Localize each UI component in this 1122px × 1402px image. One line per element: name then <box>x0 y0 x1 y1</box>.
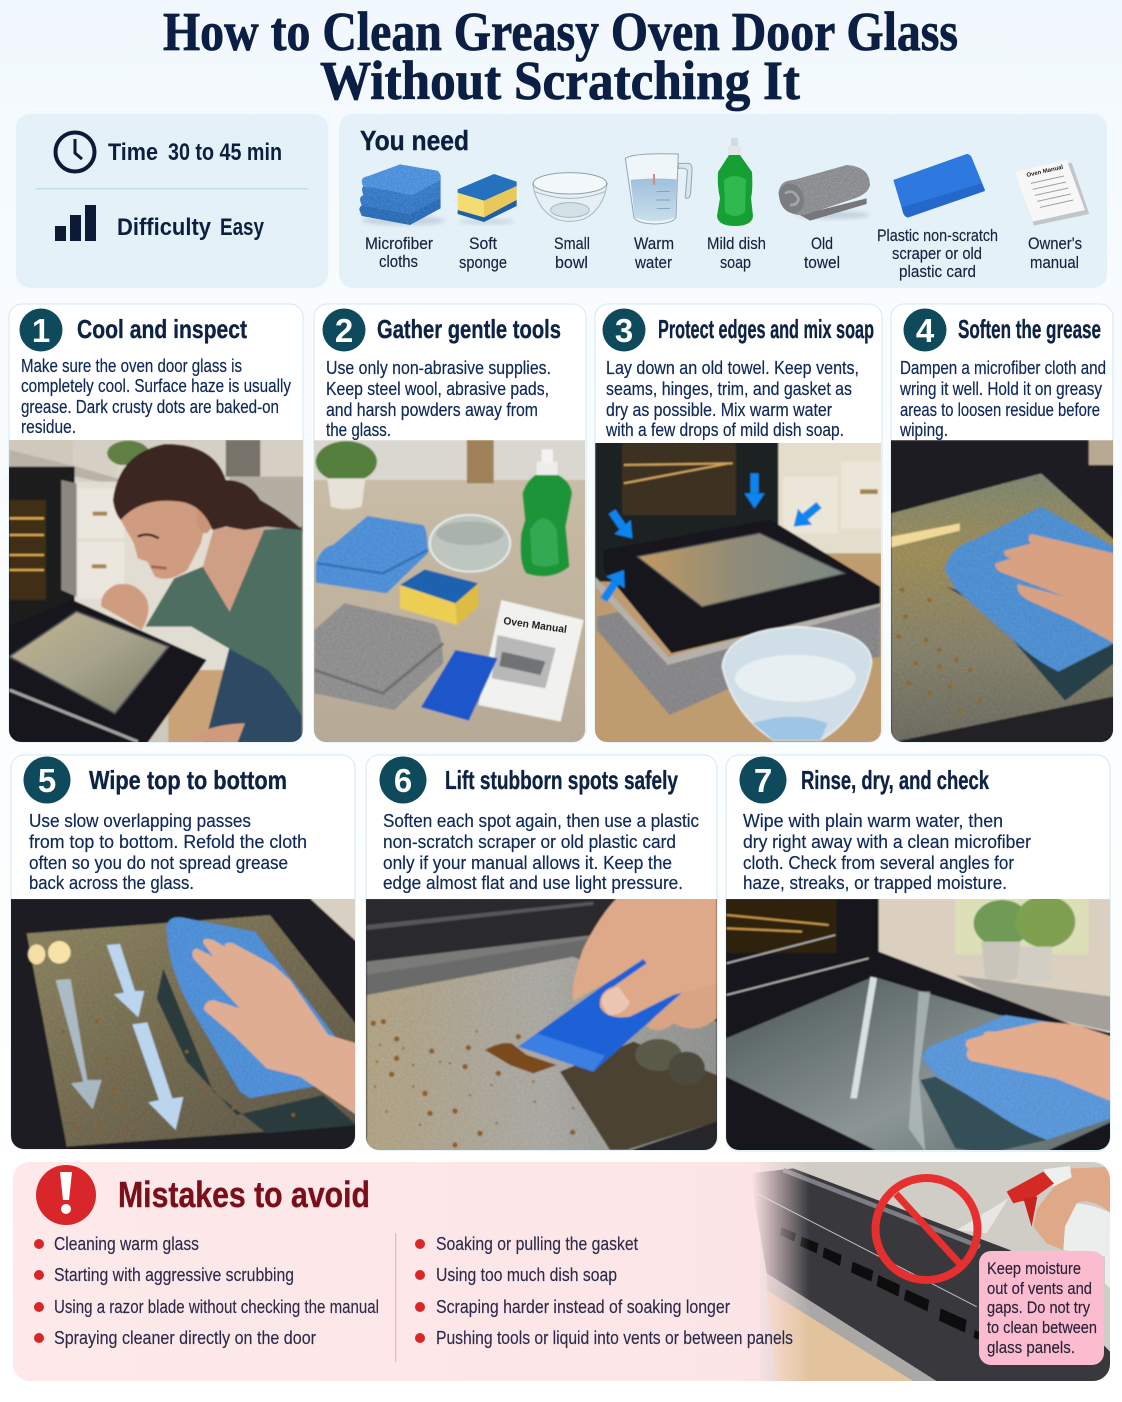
body text: edge almost flat and use light pressure. <box>383 873 683 893</box>
icon: soft sponge <box>458 174 517 224</box>
callout: keep moisture out: gaps. Do not try <box>987 1298 1090 1317</box>
icon text: oven manual: Oven Manual <box>1026 165 1064 179</box>
body text: Keep steel wool, abrasive pads, <box>326 379 549 399</box>
body text: from top to bottom. Refold the cloth <box>29 832 307 852</box>
photo: plastic scraper lifting residue <box>365 898 718 1155</box>
step number 4: 4 <box>916 312 935 349</box>
item labels: soap <box>720 254 751 272</box>
photo: wiping glass with arrows <box>10 898 357 1152</box>
callout: keep moisture out: out of vents and <box>987 1279 1092 1298</box>
item labels: Plastic non-scratch <box>877 227 998 245</box>
body text: Make sure the oven door glass is <box>21 356 242 376</box>
difficulty label <box>117 214 265 241</box>
icon: prohibition sign <box>876 1178 978 1280</box>
body text <box>899 358 1106 440</box>
body text: Use only non-abrasive supplies. <box>326 358 551 378</box>
callout: keep moisture out: to clean between <box>987 1318 1097 1337</box>
list: right mistakes: Using too much dish soap <box>436 1265 617 1285</box>
step number 4 <box>904 308 946 352</box>
step number 2 <box>322 308 366 352</box>
body text: completely cool. Surface haze is usually <box>21 376 291 396</box>
step number 5: 5 <box>38 762 56 799</box>
list: left mistakes: Starting with aggressive scrubbing <box>54 1265 294 1285</box>
list: left mistakes <box>34 1234 379 1348</box>
body text: haze, streaks, or trapped moisture. <box>743 873 1007 893</box>
time label <box>108 139 282 166</box>
item labels: manual <box>1030 254 1079 272</box>
photo: open oven door with towel and soapy bowl <box>593 442 882 745</box>
panel: step 4 <box>889 304 1116 745</box>
item labels: Mild dish <box>707 235 766 253</box>
item labels: Small <box>554 235 590 253</box>
callout: keep moisture out: Keep moisture <box>987 1259 1081 1278</box>
item labels: Owner's <box>1028 235 1082 253</box>
body text: Use slow overlapping passes <box>29 811 251 831</box>
panel: step 2 <box>312 304 587 747</box>
body text <box>326 358 551 440</box>
icon: clock <box>56 132 94 172</box>
list: left mistakes: Using a razor blade without checking the manual <box>54 1297 379 1317</box>
list: left mistakes: Spraying cleaner directly on the door <box>54 1328 316 1348</box>
panel: time and difficulty <box>16 114 328 288</box>
list: right mistakes <box>415 1234 793 1348</box>
photo: drying clean glass <box>725 896 1112 1153</box>
photo: gentle tools on counter <box>312 440 587 747</box>
step number 6: 6 <box>394 762 412 799</box>
body text <box>743 811 1031 893</box>
photo: oven vents and spray bottle <box>744 1162 1113 1383</box>
list: right mistakes: Scraping harder instead of soaking longer <box>436 1297 730 1317</box>
body text: the glass. <box>326 420 391 440</box>
body text: dry right away with a clean microfiber <box>743 832 1031 852</box>
list: right mistakes: Pushing tools or liquid into vents or between panels <box>436 1328 793 1348</box>
body text <box>605 358 859 440</box>
body text: non-scratch scraper or old plastic card <box>383 832 676 852</box>
heading: mistakes to avoid: Mistakes to avoid <box>118 1174 370 1215</box>
icon: mild dish soap <box>717 138 753 226</box>
photo fade <box>750 1162 808 1381</box>
heading: wipe top to bottom: Wipe top to bottom <box>89 765 287 795</box>
item labels: bowl <box>555 254 588 272</box>
item labels: plastic card <box>899 263 976 281</box>
photo: damp cloth on greasy glass <box>889 440 1116 745</box>
item labels: Soft <box>469 235 497 253</box>
step number 7 <box>740 756 786 804</box>
heading: gather gentle tools: Gather gentle tools <box>377 314 561 344</box>
icon: old towel <box>775 165 870 221</box>
item labels: cloths <box>379 253 418 271</box>
icon: owner's manual <box>1015 160 1089 226</box>
item labels: sponge <box>459 254 507 272</box>
body text: often so you do not spread grease <box>29 853 288 873</box>
panel: step 1 <box>0 304 306 747</box>
heading: cool and inspect: Cool and inspect <box>77 314 247 344</box>
title: How to Clean Greasy Oven Door Glass <box>163 1 958 62</box>
body text <box>383 811 699 893</box>
step number 5 <box>24 756 70 804</box>
item labels: scraper or old <box>892 245 982 263</box>
item labels: Warm <box>634 235 674 253</box>
icon: warm water jug <box>625 154 692 224</box>
item labels: Microfiber <box>365 235 433 253</box>
icon: warning <box>36 1165 96 1225</box>
heading: rinse, dry, and check: Rinse, dry, and check <box>801 765 989 795</box>
body text <box>21 356 291 437</box>
body text <box>29 811 307 893</box>
icon: difficulty bars <box>55 205 96 241</box>
body text: with a few drops of mild dish soap. <box>605 420 844 440</box>
title: Without Scratching It <box>320 50 801 111</box>
panel: step 7 <box>725 755 1112 1153</box>
step number 3: 3 <box>615 312 633 349</box>
step number 3 <box>602 308 646 352</box>
body text: residue. <box>21 417 76 437</box>
time label: 30 to 45 min <box>168 139 282 166</box>
list: right mistakes: Soaking or pulling the gasket <box>436 1234 638 1254</box>
step number 1 <box>20 308 62 352</box>
heading: lift stubborn spots safely: Lift stubborn spots safely <box>445 765 678 795</box>
time label: Time <box>108 139 158 166</box>
step number 2: 2 <box>335 312 353 349</box>
difficulty label: Difficulty <box>117 214 212 241</box>
step number 1: 1 <box>32 312 50 349</box>
panel: step 6 <box>365 755 718 1155</box>
difficulty label: Easy <box>220 214 265 241</box>
heading: you need: You need <box>360 125 469 156</box>
body text: grease. Dark crusty dots are baked-on <box>21 397 279 417</box>
panel: mistakes to avoid <box>13 1162 1113 1383</box>
icon: plastic scraper <box>893 154 985 217</box>
body text: seams, hinges, trim, and gasket as <box>606 379 852 399</box>
item labels: towel <box>804 254 840 272</box>
body text: and harsh powders away from <box>326 400 538 420</box>
item labels <box>365 227 1082 281</box>
callout: keep moisture out: glass panels. <box>987 1338 1075 1357</box>
icon: small bowl <box>533 173 607 221</box>
item labels: Old <box>811 235 833 253</box>
label: oven manual: Oven Manual <box>503 615 568 636</box>
callout: keep moisture out <box>979 1251 1104 1365</box>
body text: only if your manual allows it. Keep the <box>383 853 672 873</box>
title <box>163 1 958 111</box>
panel: you need <box>339 114 1107 288</box>
body text: wiping. <box>899 420 948 440</box>
body text: dry as possible. Mix warm water <box>606 400 832 420</box>
step number 6 <box>380 756 426 804</box>
item labels: water <box>634 254 672 272</box>
body text: Lay down an old towel. Keep vents, <box>606 358 859 378</box>
panel: step 5 <box>10 755 357 1152</box>
photo: woman inspecting oven door <box>0 437 306 747</box>
step number 7: 7 <box>754 762 772 799</box>
body text: cloth. Check from several angles for <box>743 853 1014 873</box>
heading: protect edges and mix soap: Protect edges and mix soap <box>658 314 874 344</box>
panel: step 3 <box>593 304 882 745</box>
body text: Soften each spot again, then use a plastic <box>383 811 699 831</box>
icon: microfiber cloths <box>359 164 445 225</box>
body text: Wipe with plain warm water, then <box>743 811 1003 831</box>
body text: back across the glass. <box>29 873 194 893</box>
list: left mistakes: Cleaning warm glass <box>54 1234 199 1254</box>
